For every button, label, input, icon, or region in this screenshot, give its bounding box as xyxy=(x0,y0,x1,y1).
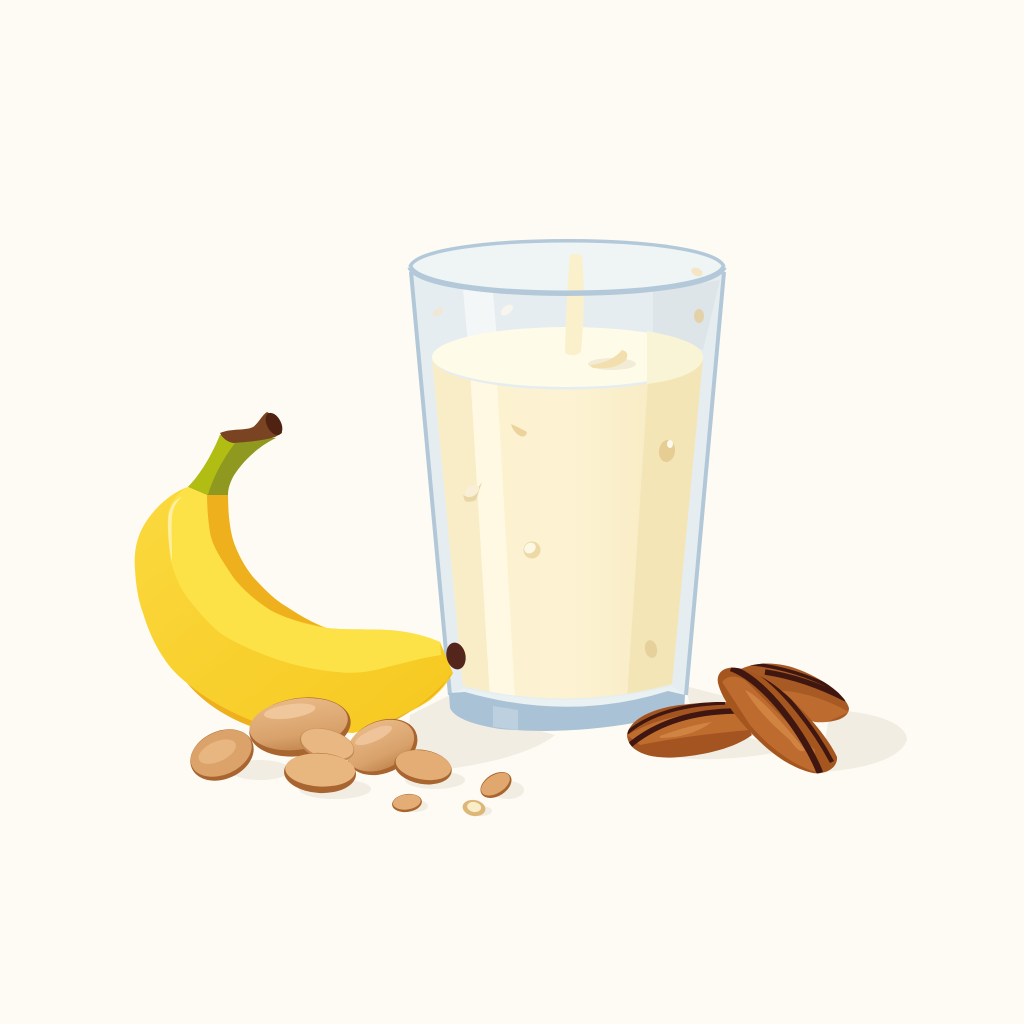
illustration: banana milk with nuts xyxy=(134,239,907,816)
glass rim xyxy=(410,241,724,293)
glass base xyxy=(449,691,685,731)
almond: right xyxy=(338,708,426,786)
banana lower edge xyxy=(187,683,255,727)
banana xyxy=(135,410,468,733)
milk surface shaded edge xyxy=(647,331,703,384)
glass body xyxy=(409,268,725,720)
stem green xyxy=(188,435,276,495)
banana body xyxy=(135,487,453,733)
banana inner stripe xyxy=(207,495,323,627)
glass bottom inner xyxy=(450,686,684,710)
glass base light strip xyxy=(493,706,518,730)
pecan: back xyxy=(741,664,849,722)
pecans xyxy=(627,664,849,774)
stem tip xyxy=(220,412,282,443)
almond: left xyxy=(182,720,262,790)
almond: small tilted xyxy=(476,767,516,803)
almond crumb xyxy=(461,798,487,818)
banana tip xyxy=(444,641,468,671)
pouring almond sliver xyxy=(565,254,584,355)
milk shading bands xyxy=(432,358,703,700)
glass of milk xyxy=(409,241,725,731)
stem cut xyxy=(262,410,286,438)
almond: far right xyxy=(391,745,455,789)
cast shadows xyxy=(230,686,907,816)
glass light bands xyxy=(463,280,720,350)
almonds xyxy=(182,691,516,818)
banana highlight xyxy=(168,497,182,562)
milk flecks xyxy=(431,266,704,659)
almond: middle top xyxy=(296,722,358,768)
pecan: left xyxy=(627,702,752,758)
floating almond slice xyxy=(588,350,636,370)
stem highlight xyxy=(188,435,235,495)
milk body xyxy=(432,358,703,699)
pecan: front xyxy=(718,668,838,774)
almond: large back xyxy=(245,691,355,763)
almond: small xyxy=(391,792,423,814)
banana bright facet xyxy=(168,487,441,673)
glass side walls xyxy=(411,272,724,695)
almond: front xyxy=(283,751,357,795)
milk surface xyxy=(432,327,703,387)
glass inner back xyxy=(411,242,723,292)
